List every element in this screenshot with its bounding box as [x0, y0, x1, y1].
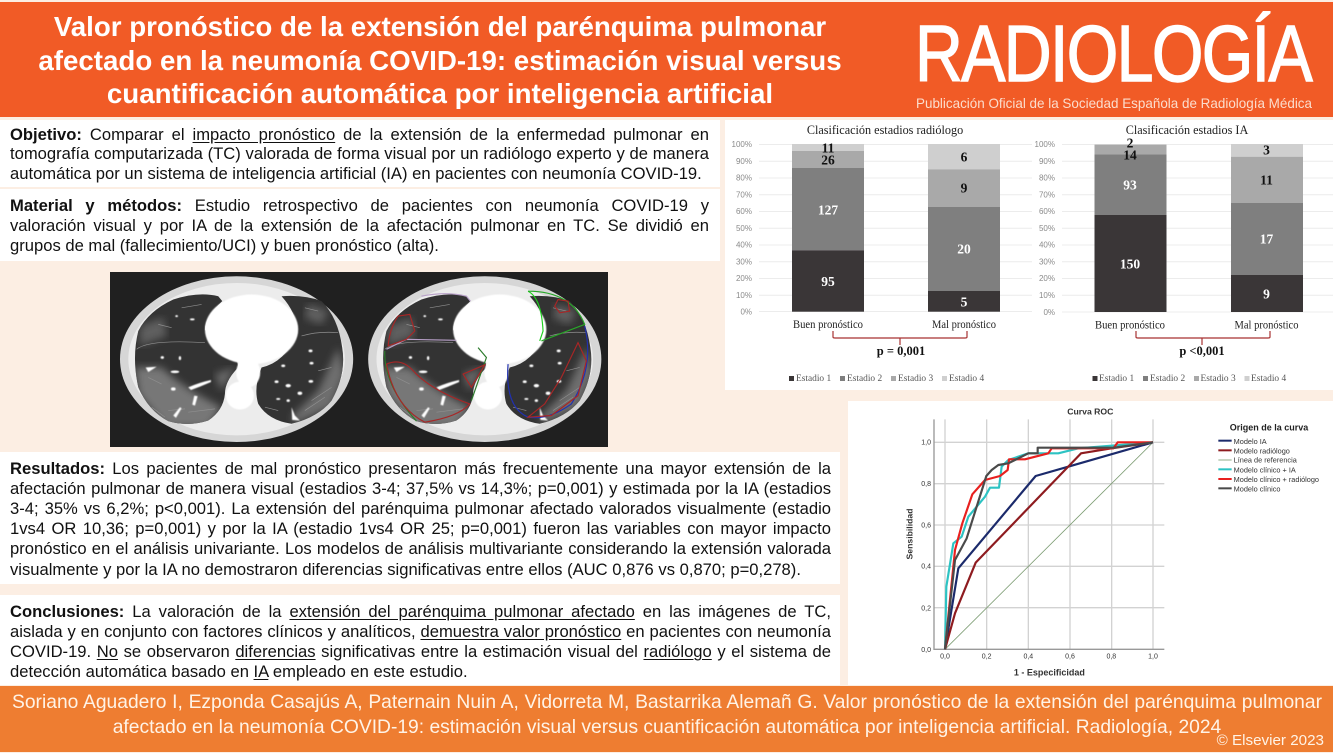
text: objetivo: automática por un sistema de inteligencia artificial (IA) en pacientes con neumonía COVID-19. [10, 164, 702, 183]
bar: mal pronóstico: 20 [957, 242, 971, 256]
legend [789, 374, 984, 384]
text: resultados: pronóstico en el análisis univariante. Los modelos de análisis multivariante considerando la extensión valorada [10, 539, 831, 558]
y axis labels: 30% [736, 258, 752, 266]
text: material y métodos: valoración visual y por IA de la extensión de la afectación pulmonar en TC. Se dividió en [10, 216, 709, 235]
bracket with p value [833, 331, 967, 358]
chart: clasificación estadios radiólogo [732, 123, 1032, 384]
legend: Estadio 3 [898, 374, 933, 384]
y axis ticks: 0,8 [921, 481, 931, 488]
chart: clasificación estadios IA: Mal pronóstico [1234, 318, 1299, 332]
bar: mal pronóstico: 11 [1260, 172, 1273, 188]
ROC legend: Modelo IA [1234, 437, 1267, 446]
y axis ticks: 1,0 [921, 440, 931, 447]
panel: ROC curve [848, 401, 1333, 685]
bar: mal pronóstico: 9 [1263, 286, 1270, 302]
bar: mal pronóstico [928, 144, 1000, 312]
chart: clasificación estadios IA [1035, 123, 1333, 384]
y axis labels: 10% [736, 291, 752, 300]
y axis ticks: 0,4 [921, 564, 931, 571]
bar: buen pronóstico: 95 [821, 274, 835, 289]
text: resultados [10, 458, 831, 579]
bar: mal pronóstico [1231, 142, 1303, 312]
title: Valor pronóstico de la extensión del parénquima pulmonar [54, 11, 826, 42]
x axis ticks: 0,0 [940, 654, 950, 661]
y axis labels [1035, 140, 1055, 317]
CT slice: AI segmentation with contours [368, 276, 601, 442]
chart title: Clasificación estadios IA [1126, 123, 1248, 137]
title: cuantificación automática por inteligencia artificial [107, 78, 773, 109]
bar: buen pronóstico: 127 [818, 202, 838, 218]
y axis labels: 60% [1039, 207, 1055, 216]
text: objetivo: tomografía computarizada (TC) valorada de forma visual por un radiólogo experto y de manera [10, 144, 709, 163]
title: afectado en la neumonía COVID-19: estimación visual versus [38, 45, 842, 76]
text: resultados: 1vs4 OR 10,36; p=0,001) y por la IA (estadio 1vs4 OR 25; p=0,001) fueron las variables con mayor impacto [10, 519, 831, 538]
y axis labels: 70% [1039, 190, 1055, 200]
text: resultados: visualmente y por la IA no demostraron diferencias significativas entre ellos (AUC 0,876 vs 0,870; p=0,278). [10, 560, 801, 579]
y axis labels: 60% [736, 207, 752, 216]
y axis ticks: 0,6 [921, 522, 931, 529]
x axis ticks: 0,2 [982, 654, 992, 661]
bar: mal pronóstico: 9 [961, 180, 968, 196]
panel: objetivo [0, 120, 720, 187]
y axis labels: 50% [1039, 224, 1055, 233]
legend: Estadio 4 [1251, 374, 1286, 384]
y axis labels: 80% [1039, 174, 1055, 182]
y axis ticks: 0,2 [921, 605, 931, 612]
bar: buen pronóstico: 150 [1120, 256, 1140, 272]
panel: stacked bar charts [725, 120, 1333, 390]
legend [1092, 374, 1286, 384]
text: material y métodos: Material y métodos: Estudio retrospectivo de pacientes con neumonía COVID-19 y [10, 196, 709, 215]
legend: Estadio 3 [1200, 374, 1236, 384]
ROC curves [945, 442, 1153, 649]
y axis labels: 90% [1039, 157, 1055, 166]
y axis labels: 70% [736, 190, 752, 200]
bar: buen pronóstico: 93 [1123, 178, 1137, 192]
x axis ticks: 0,6 [1065, 654, 1075, 661]
ROC legend [1218, 422, 1319, 494]
CT slice: original [120, 276, 353, 442]
bar: buen pronóstico [792, 140, 864, 312]
y axis labels: 30% [1039, 258, 1055, 266]
y axis labels: 40% [1039, 240, 1055, 250]
category labels: Buen pronóstico [1095, 318, 1165, 332]
header banner [0, 2, 1333, 117]
text: resultados: 3-4; 35% vs 6,2%; p<0,001). La extensión del parénquima pulmonar afectado valorados visualmente (estadio [10, 499, 831, 518]
y axis labels: 0% [1043, 308, 1055, 317]
text: resultados: afectación pulmonar de manera visual (estadios 3-4; 37,5% vs 14,3%; p=0,001) y estimada por la IA (estadios [10, 479, 831, 498]
bar: mal pronóstico: 3 [1263, 142, 1270, 158]
bar: mal pronóstico: 6 [961, 150, 968, 164]
bar: buen pronóstico [1094, 136, 1166, 312]
bracket with p value: p <0,001 [1179, 344, 1225, 358]
y axis labels: 90% [736, 157, 752, 166]
citation: afectado en la neumonía COVID-19: estimación visual versus cuantificación automática por inteligencia artificial. Radiología, 2024 [113, 716, 1221, 738]
legend: Estadio 2 [847, 374, 882, 384]
copyright: © Elsevier 2023 [1217, 732, 1324, 749]
chart title: Clasificación estadios radiólogo [807, 123, 963, 137]
y axis labels: 100% [732, 140, 752, 149]
y axis ticks: 0,0 [921, 647, 931, 654]
panel: ROC curve: Sensibilidad [904, 508, 914, 560]
bar: mal pronóstico: 17 [1260, 232, 1274, 246]
journal logo: Publicación Oficial de la Sociedad Española de Radiología Médica [916, 95, 1312, 111]
bar: buen pronóstico: 14 [1123, 148, 1137, 162]
bracket with p value: p = 0,001 [877, 344, 925, 358]
y axis labels: 20% [736, 274, 752, 283]
x axis ticks: 0,8 [1106, 654, 1116, 661]
legend: Estadio 4 [949, 374, 984, 384]
text: objetivo [10, 125, 709, 183]
y axis labels: 0% [740, 308, 752, 316]
text: objetivo: Objetivo: Comparar el impacto pronóstico de la extensión de la enfermedad pulmonar en [10, 125, 709, 144]
CT image: axial chest CT, original and AI segmentation [110, 272, 608, 447]
legend: Estadio 2 [1150, 374, 1185, 384]
x axis ticks: 0,4 [1023, 654, 1033, 661]
text: conclusiones: COVID-19. No se observaron diferencias significativas entre la estimación visual del radiólogo y el sistema de [10, 642, 831, 661]
citation: Soriano Aguadero I, Ezponda Casajús A, Paternain Nuin A, Vidorreta M, Bastarrika Alemañ G. Valor pronóstico de la extensión del parénquima pulmonar [12, 692, 1322, 713]
category labels: Buen pronóstico [793, 318, 863, 331]
text: conclusiones: Conclusiones: La valoración de la extensión del parénquima pulmonar afectado en las imágenes de TC, [10, 602, 831, 620]
text: conclusiones: aislada y en conjunto con factores clínicos y analíticos, demuestra valor pronóstico en pacientes con neumonía [10, 622, 831, 641]
ROC legend: Línea de referencia [1234, 456, 1298, 465]
y axis ticks [921, 440, 931, 654]
title [38, 11, 842, 109]
axis titles: 1 - Especificidad [1014, 668, 1085, 678]
x axis ticks: 1,0 [1148, 654, 1158, 661]
ROC legend: Origen de la curva [1230, 422, 1309, 432]
y axis labels [732, 140, 752, 316]
y axis labels: 20% [1039, 274, 1055, 283]
bracket with p value [1136, 331, 1270, 358]
text: conclusiones [10, 602, 831, 681]
ROC legend: Modelo clínico [1234, 485, 1281, 494]
panel: conclusiones [0, 595, 840, 685]
y axis labels: 40% [736, 240, 752, 250]
ROC legend: Modelo clínico + radiólogo [1234, 475, 1319, 484]
ROC legend: Modelo radiólogo [1234, 447, 1290, 456]
y axis labels: 100% [1035, 140, 1055, 149]
legend: Estadio 1 [796, 374, 831, 384]
text: resultados: Resultados: Los pacientes de mal pronóstico presentaron más frecuentemente una mayor extensión de la [10, 458, 831, 478]
bar: buen pronóstico: 2 [1127, 136, 1134, 150]
text: material y métodos [10, 196, 709, 255]
y axis labels: 80% [736, 174, 752, 182]
bar: buen pronóstico: 11 [822, 140, 835, 156]
y axis labels: 50% [736, 224, 752, 233]
bar: mal pronóstico: 5 [961, 294, 968, 310]
citation [12, 692, 1322, 738]
footer: citation band [0, 686, 1333, 752]
panel: material y métodos [0, 189, 720, 261]
x axis ticks [940, 654, 1158, 661]
text: conclusiones: detección automática basado en IA empleado en este estudio. [10, 662, 468, 681]
chart title: Curva ROC [1067, 407, 1114, 417]
bar: buen pronóstico: 26 [821, 152, 835, 168]
legend: Estadio 1 [1099, 374, 1134, 384]
text: material y métodos: grupos de mal (fallecimiento/UCI) y buen pronóstico (alta). [10, 236, 439, 255]
chart: clasificación estadios radiólogo: Mal pronóstico [932, 318, 996, 331]
panel: resultados [0, 452, 840, 584]
ROC legend: Modelo clínico + IA [1234, 465, 1296, 474]
y axis labels: 10% [1039, 291, 1055, 300]
